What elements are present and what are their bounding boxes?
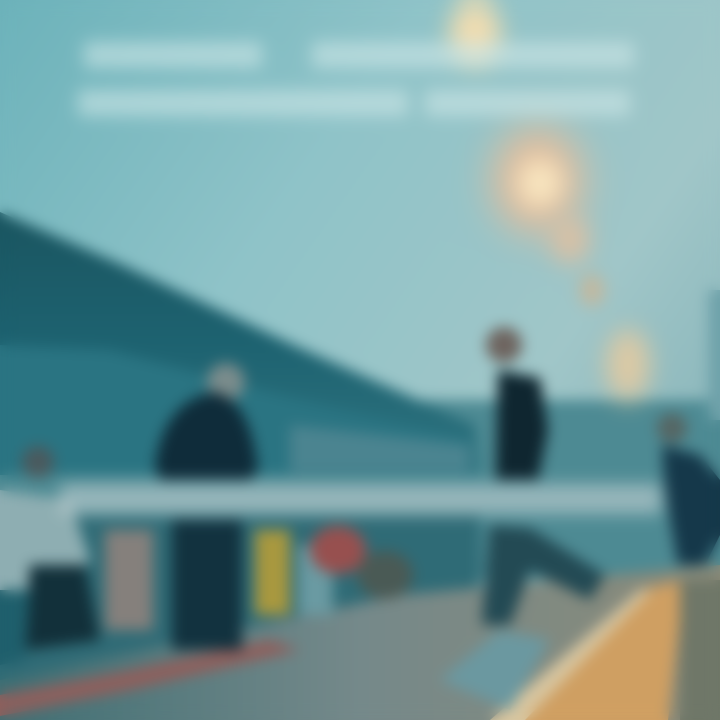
sea haze band — [0, 400, 720, 580]
group of people on the left — [0, 363, 413, 665]
ground and promenade — [0, 565, 720, 720]
lower left water below banner — [0, 515, 480, 685]
right edge structure — [708, 290, 720, 420]
right edge figure — [657, 413, 720, 565]
bridge / pier silhouette — [0, 212, 480, 475]
title placeholder: blurred two-line heading — [78, 42, 634, 116]
banner placeholder: blurred light caption strip — [60, 484, 662, 514]
walking figure — [482, 327, 605, 625]
street lamps glow — [449, 0, 650, 401]
